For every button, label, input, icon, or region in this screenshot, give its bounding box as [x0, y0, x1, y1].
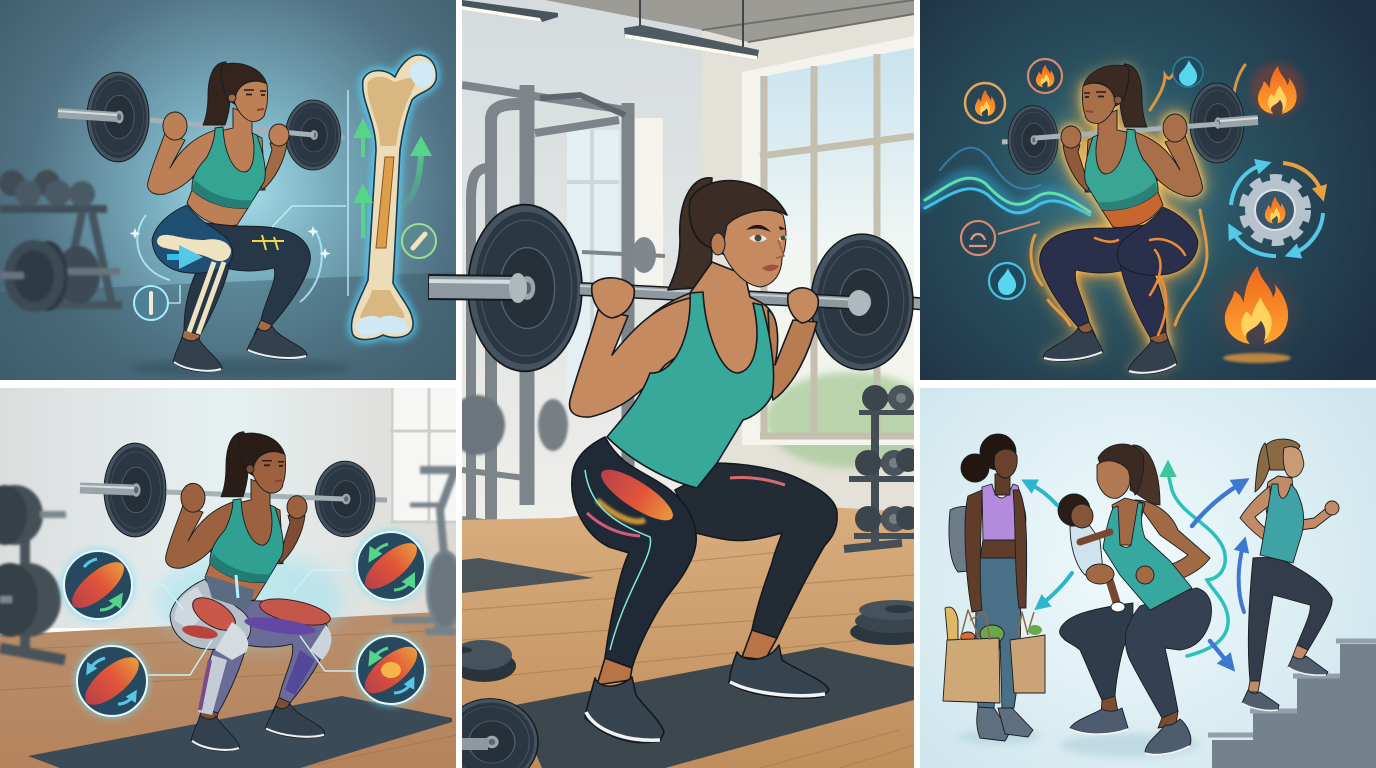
- left shoe: [585, 677, 664, 743]
- floor: [462, 500, 914, 768]
- movement arrows: [1030, 470, 1244, 663]
- woman squatting: [570, 178, 837, 743]
- inset: muscle top left: [62, 549, 134, 621]
- leg muscles: [174, 575, 333, 715]
- panel: bone health: [0, 0, 456, 380]
- panel: daily function: [920, 388, 1376, 768]
- rack plates: [449, 395, 568, 455]
- barbell: [1002, 83, 1258, 174]
- floor plates: [462, 640, 516, 682]
- hands: [592, 278, 818, 323]
- icon: joint: [134, 285, 180, 320]
- right leg: [675, 463, 837, 638]
- icon: water flame badge: [1173, 57, 1203, 87]
- ground shadows: [958, 730, 1200, 757]
- thigh muscle glow: [585, 461, 785, 650]
- woman squatting: [148, 62, 310, 372]
- window: [742, 36, 914, 472]
- bottom left plate: [462, 698, 539, 768]
- ankles: [597, 630, 777, 685]
- far window: [567, 118, 663, 400]
- bone illustration: [351, 55, 436, 340]
- flame aura: [1040, 64, 1202, 374]
- connector lines: [133, 570, 356, 675]
- ceiling: [545, 0, 914, 42]
- panel: metabolism: [920, 0, 1376, 380]
- inner flame aura: [1040, 64, 1202, 374]
- energy wave: [923, 148, 1090, 215]
- icon: large flame bottom right: [1220, 266, 1292, 363]
- woman squatting: [1040, 64, 1202, 374]
- hair: [689, 181, 787, 255]
- weight stack: [0, 485, 66, 660]
- inset: muscle bottom left: [75, 644, 149, 718]
- exercise mat: [515, 647, 914, 768]
- floor shadow: [130, 358, 350, 378]
- icon: scale badge: [961, 221, 1040, 255]
- icon: bone badge: [402, 224, 436, 258]
- left arm: [570, 298, 700, 417]
- icon: flame badge left: [965, 83, 1005, 123]
- growth arrows: [363, 130, 432, 238]
- barbell: [58, 72, 345, 170]
- icon: gear with arrows: [1231, 163, 1323, 256]
- panel: central squat: [442, 0, 935, 768]
- neck and chest: [630, 262, 775, 395]
- knee bone highlight: [130, 90, 348, 334]
- exercise mat: [28, 696, 452, 768]
- plate stack: [850, 600, 914, 645]
- dumbbell rack: [0, 170, 122, 312]
- figure glow: [155, 552, 345, 648]
- icon: large flame top right: [1250, 63, 1304, 117]
- inset: muscle bottom right: [355, 634, 427, 706]
- face: [722, 210, 786, 287]
- woman with groceries: [943, 434, 1045, 741]
- woman squatting with baby: [1058, 444, 1211, 755]
- icon: flame badge top: [1028, 59, 1062, 93]
- right arm: [768, 310, 817, 400]
- facial features: [746, 225, 787, 271]
- left leg: [572, 437, 696, 668]
- exercise bike: [392, 470, 462, 632]
- ponytail: [668, 178, 712, 290]
- ceiling lights: [462, 0, 759, 60]
- back mat: [462, 558, 594, 593]
- flame wisps: [1031, 65, 1245, 325]
- right stub behind plate: [840, 301, 914, 304]
- right shoe: [729, 645, 829, 698]
- barbell: [428, 205, 935, 371]
- dumbbell rack: [844, 385, 920, 549]
- inset: muscle top right: [355, 530, 427, 602]
- leg glow streaks: [1095, 238, 1185, 335]
- tank top: [607, 292, 774, 488]
- power rack: [462, 81, 666, 520]
- shoe soles: [586, 682, 825, 740]
- window: [390, 388, 456, 522]
- woman climbing stairs: [1240, 439, 1339, 711]
- barbell: [80, 443, 387, 537]
- panel: muscle activation: [0, 388, 462, 768]
- woman squatting: [166, 432, 328, 751]
- ear: [711, 233, 725, 255]
- staircase: [1208, 641, 1376, 768]
- icon: flame badge lower: [989, 263, 1025, 299]
